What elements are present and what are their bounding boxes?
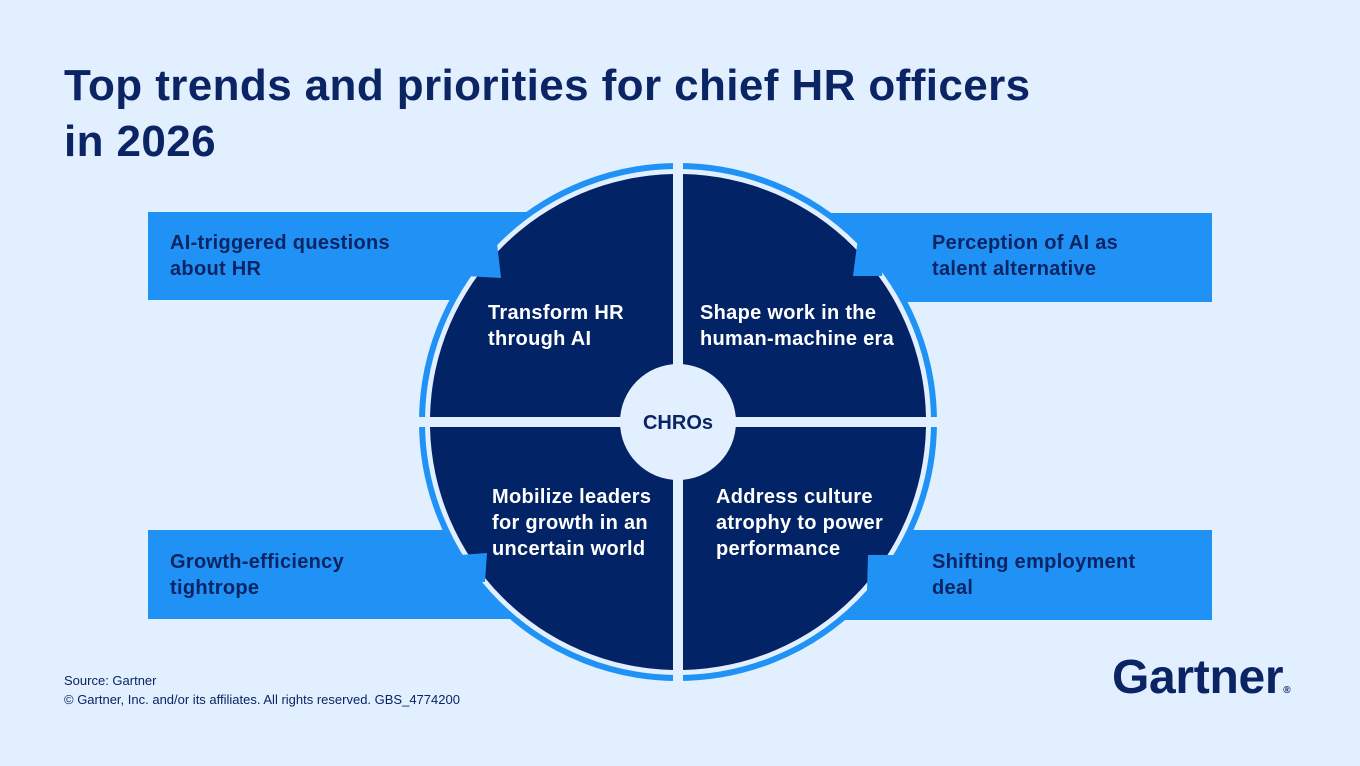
- label: Growth-efficiency: Growth-efficiency: [170, 551, 344, 573]
- label: Perception of AI: talent alternative: [932, 258, 1096, 280]
- gaps: [673, 155, 683, 690]
- title: in 2026: [64, 117, 216, 166]
- label: Perception of AI: [932, 232, 1118, 280]
- label: AI-triggered questions: [170, 232, 390, 280]
- box: Perception of AI: [810, 213, 1212, 302]
- source: [64, 673, 460, 707]
- box: Shifting employment: [810, 530, 1212, 620]
- label: AI-triggered questions: AI-triggered questions: [170, 232, 390, 254]
- title: Top trends and priorities for chief HR officers: [64, 61, 1031, 110]
- label: Shifting employment: deal: [932, 577, 973, 599]
- quadrant text: Shape work: [700, 302, 894, 350]
- quadrant text: Mobilize leaders: Mobilize leaders: [492, 486, 651, 508]
- outer ring: [422, 166, 934, 678]
- box: Growth-efficiency: [148, 530, 548, 619]
- label: Perception of AI: Perception of AI as: [932, 232, 1118, 254]
- quadrant text: Mobilize leaders: for growth in an: [492, 512, 648, 534]
- label: Growth-efficiency: tightrope: [170, 577, 259, 599]
- label: Growth-efficiency: [170, 551, 344, 599]
- quadrant text: Transform HR: Transform HR: [488, 302, 624, 324]
- quadrant text: Transform HR: through AI: [488, 328, 591, 350]
- diagram: CHROs: [643, 412, 713, 434]
- label: Shifting employment: [932, 551, 1135, 599]
- source: Source: Gartner: [64, 673, 156, 688]
- quadrant text: Mobilize leaders: uncertain world: [492, 538, 645, 560]
- box: AI-triggered questions: [148, 212, 548, 300]
- center circle: [620, 364, 736, 480]
- quadrants: [430, 174, 926, 670]
- quadrant text: Shape work: human-machine era: [700, 328, 894, 350]
- title: [64, 61, 1031, 166]
- quadrant text: Shape work: Shape work in the: [700, 302, 876, 324]
- label: Shifting employment: Shifting employment: [932, 551, 1135, 573]
- quadrant text: Transform HR: [488, 302, 624, 350]
- quadrant text: Address culture: Address culture: [716, 486, 873, 508]
- arrow wedges: [460, 238, 896, 590]
- quadrant text: Address culture: atrophy to power: [716, 512, 883, 534]
- quadrant text: Address culture: [716, 486, 883, 560]
- quadrant text: Mobilize leaders: [492, 486, 651, 560]
- logo: Gartner: Gartner®: [1112, 651, 1291, 704]
- label: AI-triggered questions: about HR: [170, 258, 261, 280]
- source: © Gartner, Inc. and/or its affiliates. All rights reserved. GBS_4774200: [64, 692, 460, 707]
- quadrant text: Address culture: performance: [716, 538, 840, 560]
